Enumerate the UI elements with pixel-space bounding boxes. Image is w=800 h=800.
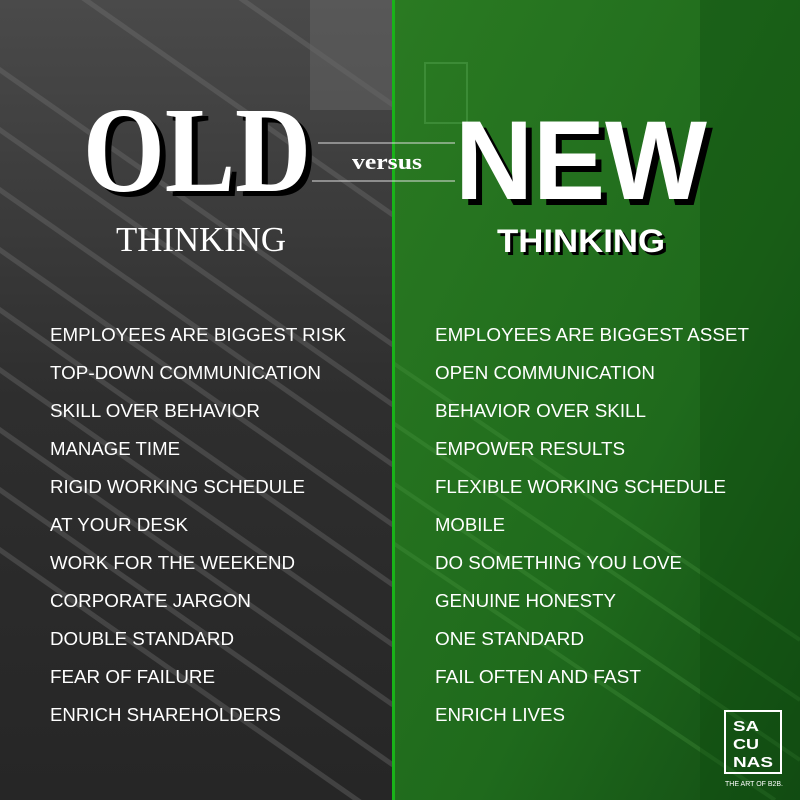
list: old thinking: WORK FOR THE WEEKEND: [50, 553, 295, 573]
title: old: OLD: [89, 88, 317, 223]
panel: old background: [0, 0, 393, 800]
subtitle: old thinking: THINKING: [116, 220, 286, 259]
list: old thinking: SKILL OVER BEHAVIOR: [50, 401, 260, 421]
title: new: NEW: [461, 104, 713, 229]
list: new thinking: EMPOWER RESULTS: [435, 439, 625, 459]
list: new thinking: ONE STANDARD: [435, 629, 584, 649]
list: old thinking: CORPORATE JARGON: [50, 591, 251, 611]
list: new thinking: EMPLOYEES ARE BIGGEST ASSET: [435, 325, 749, 345]
logo: sacunas: [725, 711, 783, 788]
logo: sacunas: NAS: [733, 754, 773, 771]
list: new thinking: GENUINE HONESTY: [435, 591, 616, 611]
panel: new background: [393, 0, 800, 800]
subtitle: new thinking: THINKING: [497, 223, 665, 259]
list: old thinking: ENRICH SHAREHOLDERS: [50, 705, 281, 725]
logo: sacunas: SA: [733, 718, 759, 735]
logo: sacunas: THE ART OF B2B.: [725, 781, 783, 788]
list: new thinking: [435, 325, 749, 725]
list: new thinking: DO SOMETHING YOU LOVE: [435, 553, 682, 573]
list: old thinking: AT YOUR DESK: [50, 515, 188, 535]
divider: [392, 0, 395, 800]
list: old thinking: FEAR OF FAILURE: [50, 667, 215, 687]
list: old thinking: RIGID WORKING SCHEDULE: [50, 477, 305, 497]
list: new thinking: FAIL OFTEN AND FAST: [435, 667, 641, 687]
list: old thinking: EMPLOYEES ARE BIGGEST RISK: [50, 325, 346, 345]
list: new thinking: ENRICH LIVES: [435, 705, 565, 725]
list: new thinking: OPEN COMMUNICATION: [435, 363, 655, 383]
subtitle: new thinking: THINKING: [500, 226, 668, 262]
list: new thinking: BEHAVIOR OVER SKILL: [435, 401, 646, 421]
versus: versus: [352, 149, 423, 174]
logo: sacunas: CU: [733, 736, 759, 753]
list: new thinking: MOBILE: [435, 515, 505, 535]
connector lines: [312, 143, 455, 181]
title: new: NEW: [455, 98, 707, 223]
list: old thinking: TOP-DOWN COMMUNICATION: [50, 363, 321, 383]
list: new thinking: FLEXIBLE WORKING SCHEDULE: [435, 477, 726, 497]
list: old thinking: MANAGE TIME: [50, 439, 180, 459]
title: old: OLD: [83, 83, 311, 218]
list: old thinking: [50, 325, 346, 725]
list: old thinking: DOUBLE STANDARD: [50, 629, 234, 649]
